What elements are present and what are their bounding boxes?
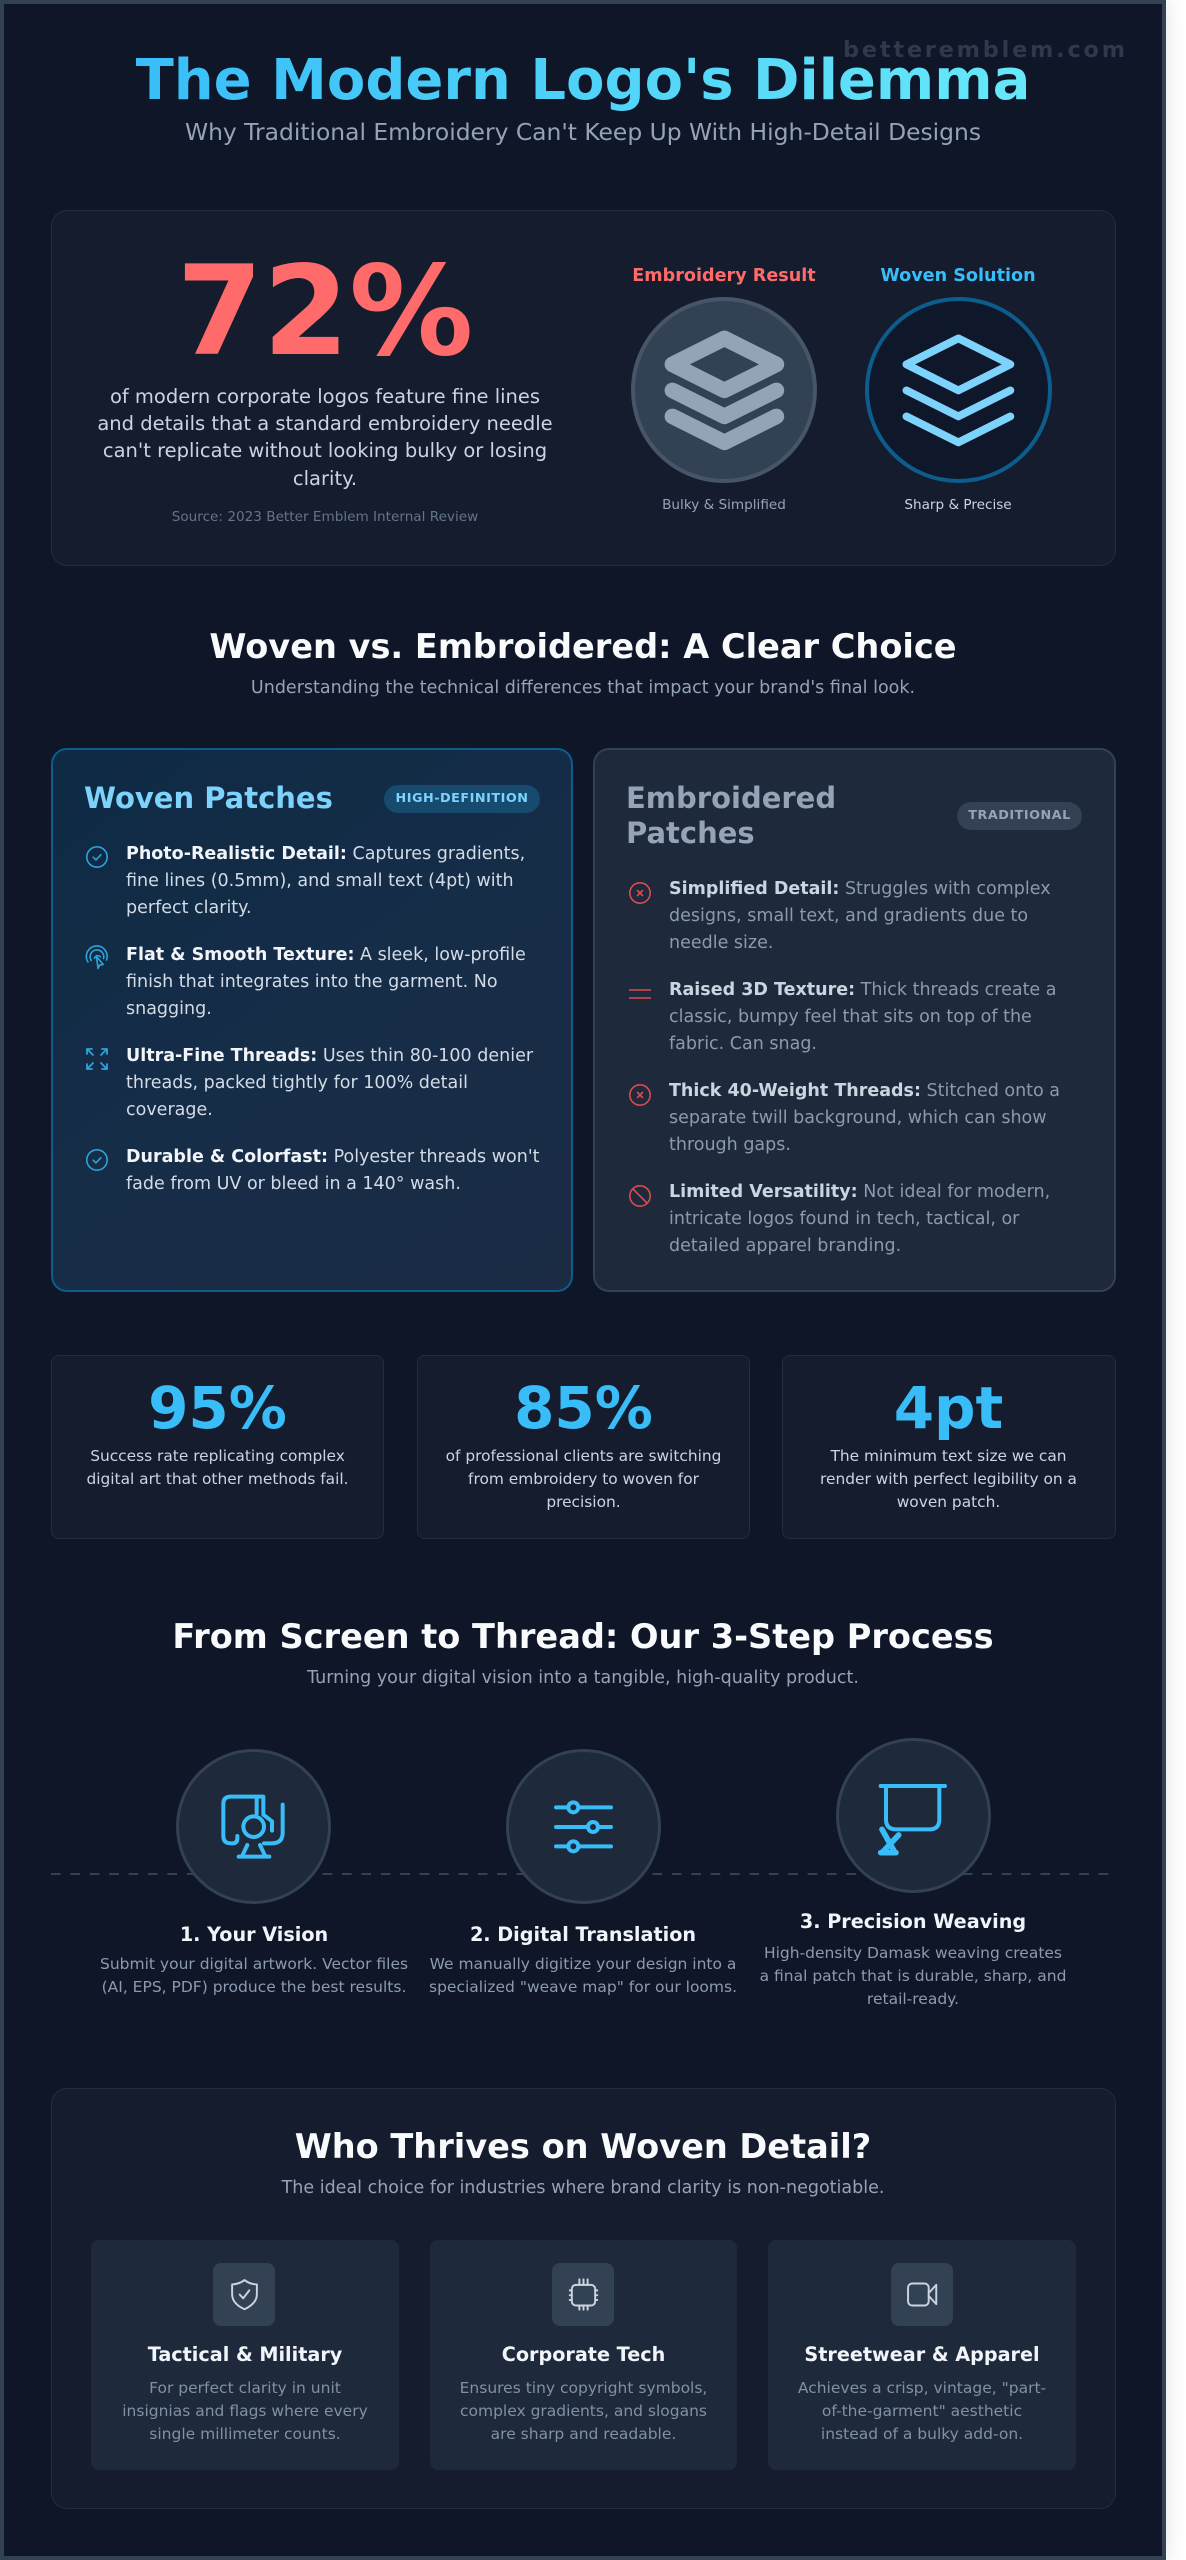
embroidered item: simplified: needle size.: [669, 933, 773, 953]
stat value 95%: 95%: [148, 1374, 287, 1442]
stat card: 95%: [50, 1355, 384, 1539]
panel: woven patches: [50, 748, 573, 1292]
step 1 title: 1. Your Vision: [180, 1923, 328, 1946]
embroidered item: limited: intricate logos found in tech, tactical, or: [669, 1209, 1019, 1229]
hero description: can't replicate without looking bulky or losing: [103, 439, 547, 462]
embroidered item: limited: [669, 1182, 1050, 1256]
stat text 85%: of professional clients are switching: [446, 1446, 721, 1464]
woven item: flat: snagging.: [126, 999, 212, 1019]
tech title: Corporate Tech: [502, 2343, 665, 2366]
stat text 85%: [446, 1446, 721, 1511]
tech description: complex gradients, and slogans: [460, 2402, 707, 2420]
icon: sliders: [554, 1800, 613, 1854]
subheading: comparison: Understanding the technical differences that impact your brand's final look.: [251, 678, 915, 698]
icon: expand arrows: [86, 1048, 108, 1070]
stat card: 85%: [416, 1355, 750, 1539]
big number 72%: 72%: [177, 240, 473, 384]
tech description: are sharp and readable.: [491, 2425, 676, 2443]
step 3 description: retail-ready.: [867, 1990, 959, 2008]
tactical description: [122, 2379, 368, 2443]
embroidered item: thick: separate twill background, which can show: [669, 1108, 1047, 1128]
stat text 4pt: woven patch.: [897, 1493, 1000, 1511]
tactical title: Tactical & Military: [148, 2343, 342, 2366]
heading: comparison: Woven vs. Embroidered: A Clear Choice: [209, 627, 957, 666]
embroidered item: raised: [669, 980, 1056, 1054]
embroidered heading: Embroidered: [626, 781, 836, 815]
icon: touch signal: [86, 945, 108, 970]
icon: woven layers: [865, 297, 1052, 483]
streetwear description: Achieves a crisp, vintage, "part-: [798, 2379, 1046, 2397]
woven heading: Woven Patches: [84, 781, 333, 815]
step 3 description: High-density Damask weaving creates: [764, 1944, 1062, 1962]
badge: traditional: [957, 802, 1082, 830]
streetwear description: [798, 2379, 1046, 2443]
tactical description: single millimeter counts.: [149, 2425, 341, 2443]
embroidered item: thick: Thick 40-Weight Threads: Stitched onto a: [669, 1080, 1060, 1100]
woven item: durable: Durable & Colorfast: Polyester threads won't: [126, 1146, 540, 1166]
step 1 description: (AI, EPS, PDF) produce the best results.: [102, 1978, 406, 1996]
hero description: of modern corporate logos feature fine lines: [110, 385, 540, 408]
icon: check circle: [86, 846, 108, 868]
streetwear description: of-the-garment" aesthetic: [822, 2402, 1022, 2420]
embroidered item: simplified: [669, 878, 1051, 953]
badge: traditional: TRADITIONAL: [968, 808, 1071, 823]
woven item: photo-realistic: [126, 844, 525, 918]
woven item: durable: fade from UV or bleed in a 140° wash.: [126, 1174, 461, 1194]
panel: industries: [50, 2088, 1116, 2509]
embroidered item: simplified: designs, small text, and gradients due to: [669, 906, 1028, 926]
icon: loom frame: [878, 1784, 947, 1856]
panel: hero statistic: [50, 210, 1116, 566]
tactical description: For perfect clarity in unit: [149, 2379, 341, 2397]
icon tile: chip: [552, 2263, 614, 2326]
subtitle: Why Traditional Embroidery Can't Keep Up With High-Detail Designs: [185, 118, 981, 146]
embroidered item: raised: classic, bumpy feel that sits on top of the: [669, 1007, 1032, 1027]
woven item: flat: finish that integrates into the garment. No: [126, 972, 498, 992]
heading: process: From Screen to Thread: Our 3-Step Process: [172, 1617, 994, 1656]
industry card: tactical: [91, 2240, 399, 2470]
label: woven solution: Woven Solution: [880, 266, 1036, 286]
woven item: flat: Flat & Smooth Texture: A sleek, low-profile: [126, 944, 526, 964]
embroidered item: raised: fabric. Can snag.: [669, 1034, 817, 1054]
icon: x circle: [629, 882, 651, 904]
hero description: clarity.: [293, 467, 357, 490]
heading: industries: Who Thrives on Woven Detail?: [295, 2127, 871, 2166]
step 1 circle: [176, 1749, 331, 1904]
hero source: Source: 2023 Better Emblem Internal Review: [172, 509, 478, 525]
woven item: photo-realistic: fine lines (0.5mm), and small text (4pt) with: [126, 871, 514, 891]
stat card: 4pt: [782, 1355, 1116, 1539]
hero description: [97, 385, 553, 490]
tech description: Ensures tiny copyright symbols,: [460, 2379, 707, 2397]
industry card: streetwear: [768, 2240, 1076, 2470]
step 3 title: 3. Precision Weaving: [800, 1910, 1026, 1933]
tactical description: insignias and flags where every: [122, 2402, 368, 2420]
icon tile: shield: [213, 2263, 275, 2326]
embroidered heading: Patches: [626, 816, 755, 850]
stat value 4pt: 4pt: [894, 1374, 1003, 1442]
stat value 85%: 85%: [514, 1374, 653, 1442]
embroidered item: raised: Raised 3D Texture: Thick threads create a: [669, 980, 1056, 1000]
woven item: photo-realistic: perfect clarity.: [126, 898, 252, 918]
caption: sharp: Sharp & Precise: [904, 497, 1012, 513]
step 1 description: Submit your digital artwork. Vector files: [100, 1954, 408, 1972]
woven item: flat: [126, 944, 526, 1019]
step 1 description: [100, 1954, 408, 1996]
embroidered heading: [626, 781, 836, 850]
icon tile: video: [891, 2263, 953, 2326]
embroidered item: limited: detailed apparel branding.: [669, 1236, 901, 1256]
step 2 title: 2. Digital Translation: [470, 1923, 696, 1946]
subheading: industries: The ideal choice for industries where brand clarity is non-negotiable.: [282, 2178, 884, 2198]
step 3 description: a final patch that is durable, sharp, and: [760, 1967, 1066, 1985]
process dashed connector: [51, 1873, 1108, 1875]
streetwear description: instead of a bulky add-on.: [821, 2425, 1023, 2443]
label: embroidery result: Embroidery Result: [632, 266, 816, 286]
step 3 circle: [836, 1738, 990, 1893]
subheading: process: Turning your digital vision into a tangible, high-quality product.: [307, 1668, 859, 1688]
woven item: ultra-fine: Ultra-Fine Threads: Uses thin 80-100 denier: [126, 1046, 533, 1066]
watermark: betteremblem.com: [843, 37, 1128, 63]
woven item: ultra-fine: coverage.: [126, 1100, 213, 1120]
stat text 4pt: [820, 1446, 1077, 1511]
embroidered item: limited: Limited Versatility: Not ideal for modern,: [669, 1182, 1050, 1202]
panel: embroidered patches: [593, 748, 1116, 1292]
badge: high-definition: [384, 785, 540, 813]
embroidered item: simplified: Simplified Detail: Struggles with complex: [669, 878, 1051, 898]
step 2 description: We manually digitize your design into a: [430, 1954, 736, 1972]
stat text 95%: digital art that other methods fail.: [86, 1470, 349, 1488]
step 2 description: specialized "weave map" for our looms.: [429, 1978, 737, 1996]
tech description: [460, 2379, 707, 2443]
stat text 85%: from embroidery to woven for: [468, 1470, 699, 1488]
step 2 description: [429, 1954, 737, 1996]
woven item: photo-realistic: Photo-Realistic Detail: Captures gradients,: [126, 844, 525, 864]
icon: design on monitor: [221, 1794, 285, 1859]
icon: prohibited: [629, 1185, 651, 1207]
icon: embroidery layers: [631, 297, 817, 483]
woven item: ultra-fine: [126, 1046, 534, 1120]
stat text 4pt: render with perfect legibility on a: [820, 1470, 1077, 1488]
embroidered item: thick: [669, 1080, 1060, 1155]
badge: high-definition: HIGH-DEFINITION: [396, 791, 528, 806]
caption: bulky: Bulky & Simplified: [662, 497, 786, 513]
stat text 95%: Success rate replicating complex: [90, 1446, 345, 1464]
icon: check circle: [86, 1149, 108, 1171]
step 2 circle: [506, 1749, 660, 1904]
hero description: and details that a standard embroidery needle: [97, 412, 553, 435]
streetwear title: Streetwear & Apparel: [804, 2343, 1040, 2366]
stat text 95%: [86, 1446, 349, 1488]
woven item: durable: [126, 1146, 540, 1194]
embroidered item: thick: through gaps.: [669, 1135, 791, 1155]
icon: x circle: [629, 1084, 651, 1106]
icon: equals lines: [629, 989, 651, 999]
industry card: tech: [430, 2240, 737, 2470]
stat text 4pt: The minimum text size we can: [830, 1446, 1067, 1464]
stat text 85%: precision.: [546, 1493, 621, 1511]
title: The Modern Logo's Dilemma: [136, 48, 1030, 113]
woven item: ultra-fine: threads, packed tightly for 100% detail: [126, 1073, 468, 1093]
step 3 description: [760, 1944, 1066, 2008]
